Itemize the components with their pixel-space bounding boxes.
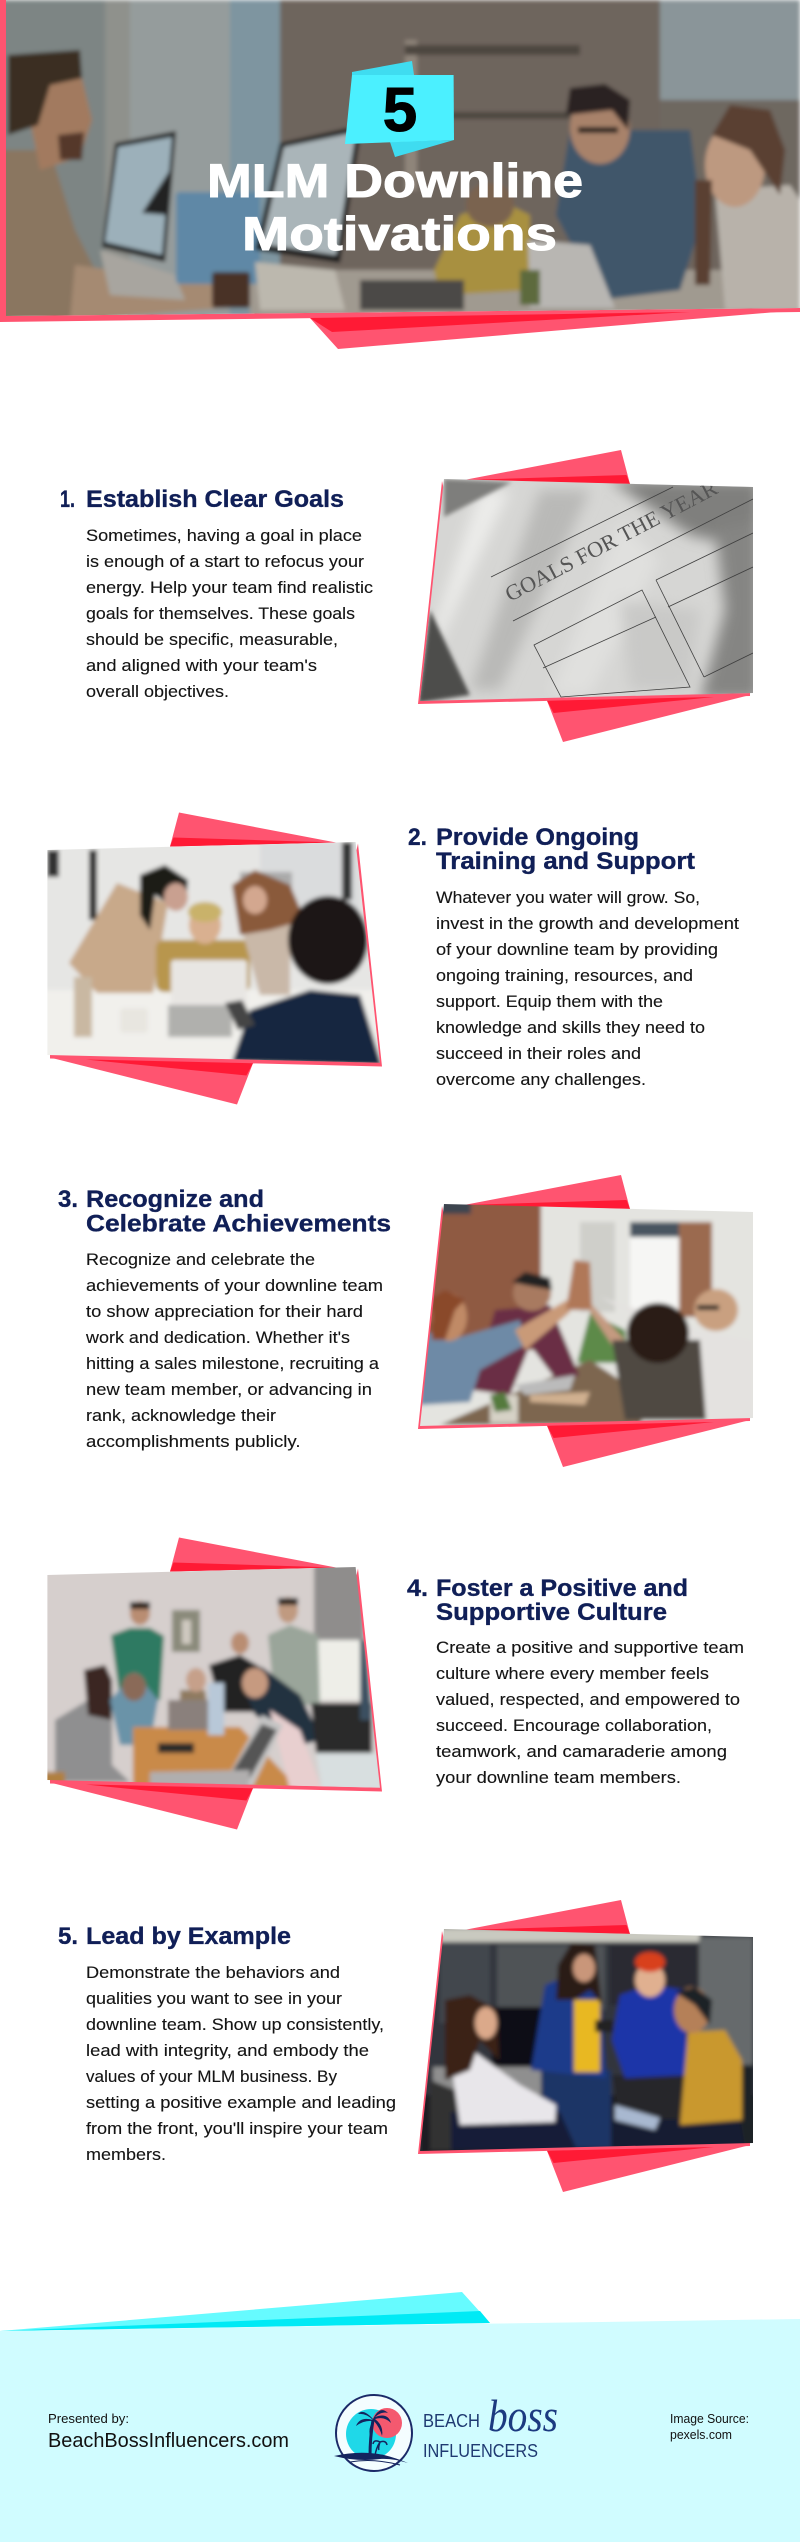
text block: step 3: rank, acknowledge their	[86, 1407, 277, 1425]
text block: step 3: to show appreciation for their hard	[86, 1303, 363, 1321]
text block: step 4: Create a positive and supportive team	[436, 1639, 744, 1657]
panel: step 3 recognize and celebrate achievements	[58, 1175, 760, 1467]
text block: step 5	[86, 1964, 396, 2164]
number five: 5	[383, 76, 417, 145]
text block: step 5: members.	[86, 2146, 166, 2164]
text block: step 5: Demonstrate the behaviors and	[86, 1964, 340, 1982]
icon: palm tree in circle	[334, 2395, 412, 2471]
text block: step 5: setting a positive example and leading	[86, 2094, 396, 2112]
heading: step 1: 1.	[60, 486, 75, 513]
heading: step 2: 2.	[408, 824, 427, 851]
logo wordmark	[423, 2390, 558, 2461]
heading: step 3: Recognize and	[86, 1186, 264, 1213]
text block: step 4: teamwork, and camaraderie among	[436, 1743, 727, 1761]
presented by credit: BeachBossInfluencers.com	[48, 2430, 289, 2452]
panel: step 5 lead by example	[58, 1900, 760, 2192]
text block: step 2: knowledge and skills they need to	[436, 1019, 705, 1037]
decorative pink frame: step 2	[50, 812, 382, 1104]
heading: step 5: 5.	[58, 1923, 78, 1950]
text block: step 3: work and dedication. Whether it's	[85, 1329, 350, 1347]
text block: step 4	[436, 1639, 744, 1787]
text block: step 2: invest in the growth and development	[436, 915, 739, 933]
decorative pink frame: step 1	[418, 450, 750, 742]
text block: step 1: should be specific, measurable,	[86, 631, 338, 649]
image source credit: Image Source:	[670, 2411, 749, 2426]
text block: step 4: culture where every member feels	[436, 1665, 709, 1683]
text block: step 2: of your downline team by providing	[436, 941, 718, 959]
photo: team high five at table	[415, 1200, 760, 1430]
text block: step 1: and aligned with your team's	[86, 657, 317, 675]
text block: step 5: values of your MLM business. By	[86, 2068, 338, 2086]
photo: goals for the year planner: GOALS FOR THE YEAR	[501, 475, 722, 606]
footer	[0, 2292, 800, 2542]
text block: step 2: support. Equip them with the	[436, 993, 663, 1011]
photo: colleagues laughing in an office	[415, 1925, 760, 2155]
image source credit	[670, 2411, 749, 2442]
heading: step 4: Supportive Culture	[436, 1599, 667, 1626]
text block: step 5: downline team. Show up consistently,	[86, 2016, 384, 2034]
text block: step 1	[86, 527, 373, 701]
text block: step 4: your downline team members.	[436, 1769, 681, 1787]
text block: step 1: Sometimes, having a goal in place	[86, 527, 362, 545]
header banner	[0, 0, 800, 349]
decorative pink frame: step 5	[418, 1900, 750, 2192]
decorative pink frame: step 4	[50, 1538, 382, 1830]
footer background	[0, 2319, 800, 2542]
title	[207, 154, 583, 260]
panel: step 1 establish clear goals	[60, 450, 760, 742]
heading: step 4: Foster a Positive and	[436, 1575, 688, 1602]
presented by credit: Presented by:	[48, 2411, 129, 2426]
text block: step 2	[436, 889, 739, 1089]
text block: step 5: qualities you want to see in your	[86, 1990, 343, 2008]
title: MLM Downline	[207, 154, 583, 207]
panel: step 2 ongoing training and support	[40, 812, 739, 1104]
footer cyan ribbon	[0, 2292, 490, 2331]
heading: step 4: 4.	[407, 1575, 428, 1602]
photo: group gathered around laptops	[40, 1563, 385, 1793]
text block: step 2: ongoing training, resources, and	[436, 967, 693, 985]
text block: step 1: is enough of a start to refocus your	[86, 553, 365, 571]
text block: step 4: succeed. Encourage collaboration,	[436, 1717, 712, 1735]
presented by credit	[48, 2411, 289, 2452]
heading: step 3: 3.	[58, 1186, 78, 1213]
text block: step 3: hitting a sales milestone, recruiting a	[86, 1355, 380, 1373]
title: Motivations	[242, 207, 557, 260]
decorative pink frame: step 3	[418, 1175, 750, 1467]
heading: step 2: Provide Ongoing	[436, 824, 639, 851]
logo wordmark: INFLUENCERS	[423, 2441, 538, 2461]
text block: step 2: succeed in their roles and	[436, 1045, 641, 1063]
text block: step 3: achievements of your downline team	[86, 1277, 383, 1295]
heading: step 3	[58, 1186, 391, 1238]
logo wordmark: BEACH	[423, 2411, 480, 2431]
logo: beach boss influencers	[334, 2390, 558, 2471]
text block: step 2: overcome any challenges.	[436, 1071, 646, 1089]
text block: step 5: from the front, you'll inspire your team	[86, 2120, 388, 2138]
heading: step 2: Training and Support	[436, 848, 695, 875]
photo: colleagues around a laptop	[40, 838, 385, 1070]
header pink frame and ribbon	[0, 0, 800, 349]
text block: step 3: accomplishments publicly.	[86, 1433, 300, 1451]
panel: step 4 positive and supportive culture	[40, 1538, 744, 1830]
icon: cyan number badge	[345, 61, 454, 157]
heading: step 1: Establish Clear Goals	[86, 486, 344, 513]
text block: step 5: lead with integrity, and embody the	[86, 2042, 369, 2060]
photo: goals for the year planner	[415, 475, 760, 705]
text block: step 3	[85, 1251, 383, 1451]
text block: step 1: goals for themselves. These goals	[86, 605, 355, 623]
logo wordmark: boss	[488, 2390, 558, 2441]
text block: step 3: new team member, or advancing in	[86, 1381, 372, 1399]
text block: step 1: overall objectives.	[86, 683, 229, 701]
heading: step 2	[408, 824, 695, 875]
text block: step 3: Recognize and celebrate the	[86, 1251, 315, 1269]
heading: step 5: Lead by Example	[86, 1923, 291, 1950]
header photo: team working at desks	[0, 0, 800, 320]
image source credit: pexels.com	[670, 2427, 732, 2442]
text block: step 4: valued, respected, and empowered to	[436, 1691, 740, 1709]
heading: step 3: Celebrate Achievements	[86, 1210, 391, 1238]
heading: step 4	[407, 1575, 688, 1626]
text block: step 2: Whatever you water will grow. So,	[436, 889, 700, 907]
text block: step 1: energy. Help your team find realistic	[86, 579, 373, 597]
